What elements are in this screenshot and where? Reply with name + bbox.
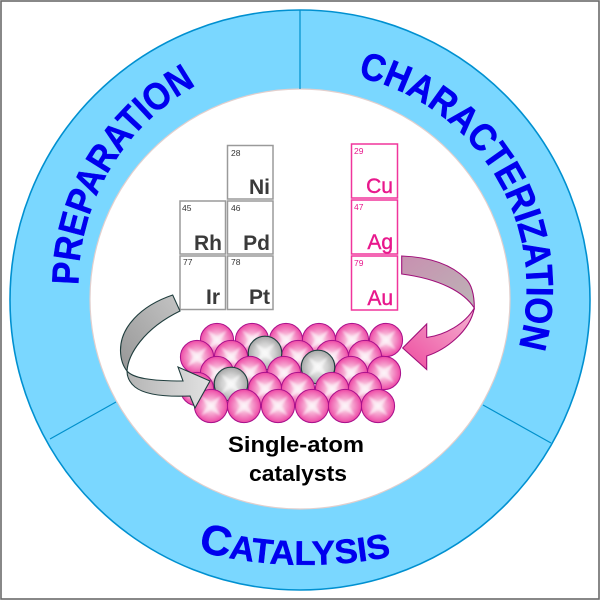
cell: Au: 79 [354,258,364,268]
cell: Ir: 77 [183,257,193,267]
cell: Cu [352,144,398,198]
cell: Rh [180,201,226,255]
cell: Rh: Rh [194,232,222,255]
cell: Rh: 45 [182,203,192,213]
cell: Cu: 29 [354,146,364,156]
cell: Ag [352,200,398,254]
label: single-atom catalysts [228,432,364,486]
cell: Pd: 46 [231,203,241,213]
panel: pink element cells [352,144,398,310]
cell: Ni: 28 [231,148,241,158]
arrow: pink, from Au to lattice [402,256,474,370]
arrow: grey, from Ir to lattice [120,295,210,408]
cell: Cu: Cu [366,175,393,198]
cell: Ir [180,256,226,310]
inner white disc [90,89,510,509]
heading: catalysis: CATALYSIS [202,525,390,566]
catalyst atom lattice [177,320,406,426]
cell: Pd: Pd [243,232,270,255]
heading: characterization: CHARACTERIZATION [362,54,554,351]
label: single-atom catalysts: catalysts [249,461,347,486]
cell: Ni [228,146,273,199]
cell: Au [352,256,398,310]
cell: Ag: Ag [367,231,393,254]
cell: Pt: Pt [249,286,270,309]
cell: Ni: Ni [249,176,270,199]
cell: Ir: Ir [206,286,220,309]
heading: preparation: PREPARATION [52,64,194,284]
cell: Pd [228,201,273,255]
panel: grey element cells [180,146,273,310]
cell: Ag: 47 [354,202,364,212]
label: single-atom catalysts: Single-atom [228,432,364,457]
cell: Pt: 78 [231,257,241,267]
cell: Pt [228,256,273,310]
cell: Au: Au [367,287,393,310]
